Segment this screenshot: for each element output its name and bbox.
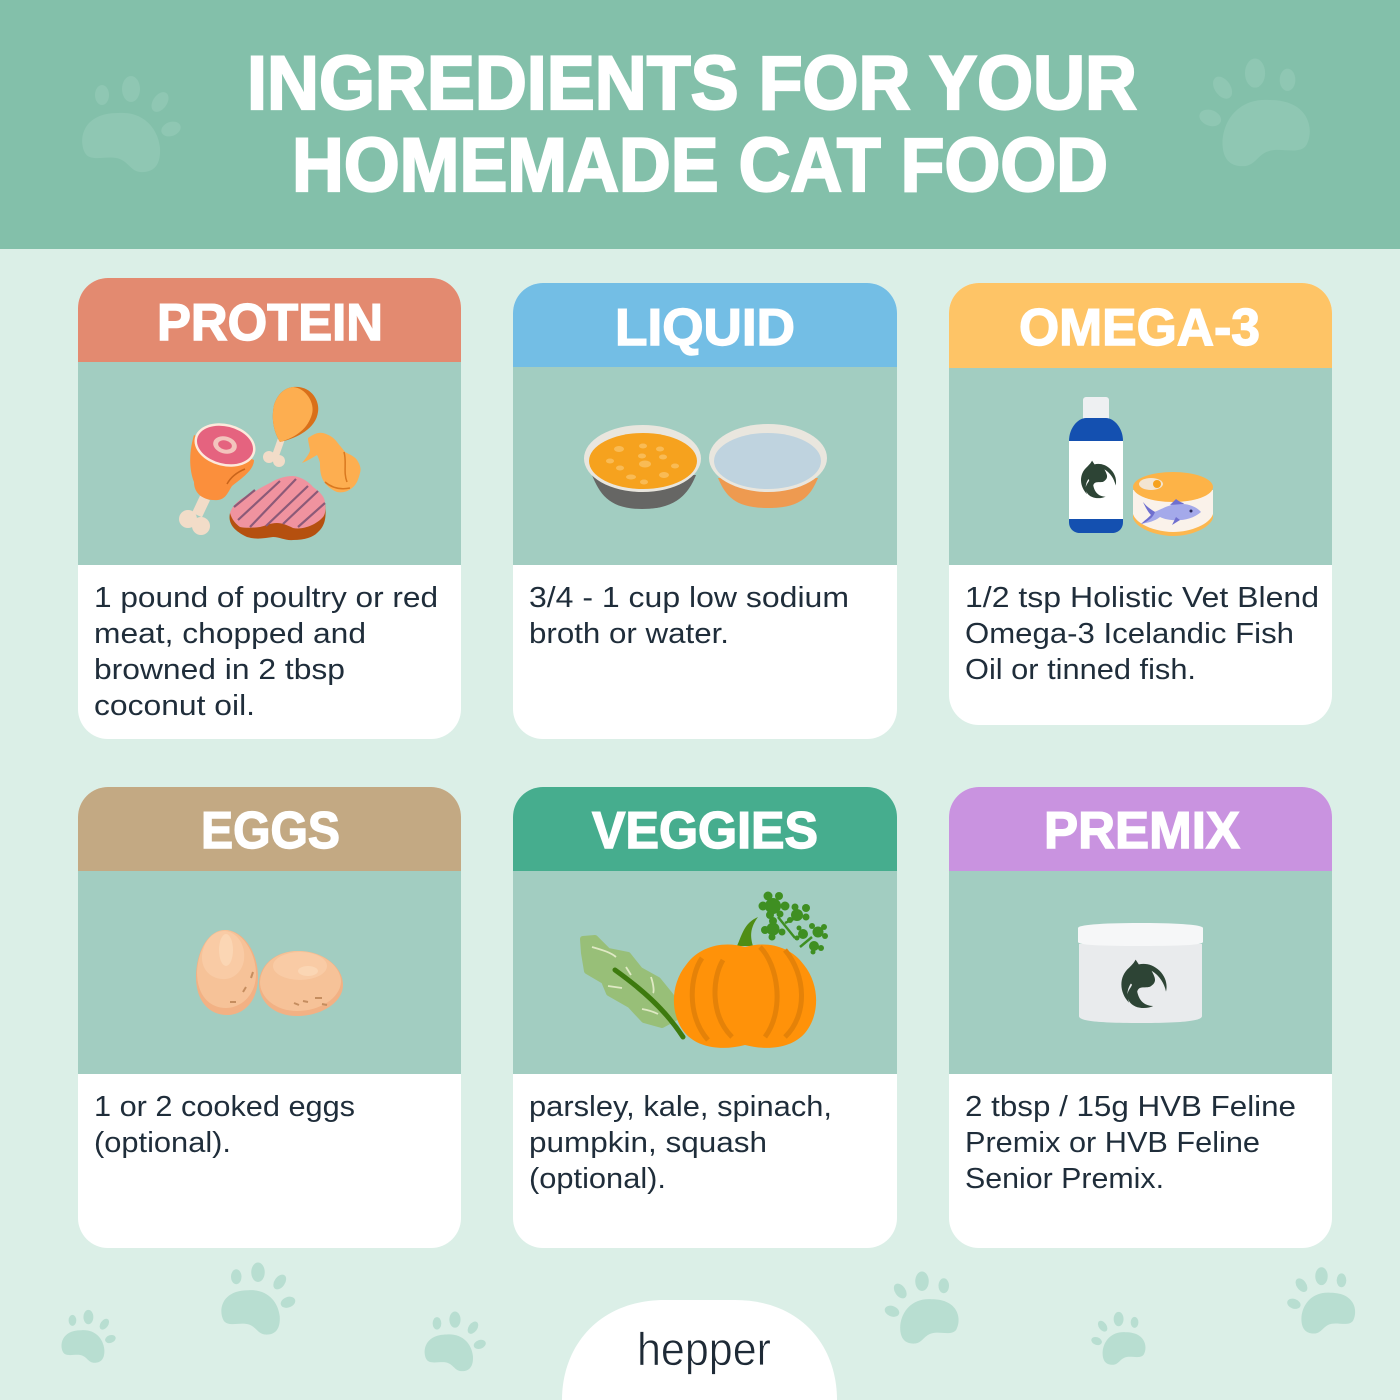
heading: veggies: VEGGIES: [592, 802, 818, 860]
text: veggies description: pumpkin, squash: [529, 1127, 767, 1159]
icon: paw top left: [82, 76, 183, 172]
text: protein description: [94, 582, 438, 722]
icon: eggs: [196, 930, 343, 1016]
icon: water bowl: [709, 424, 827, 508]
icon: brand logo on jar: [1121, 960, 1167, 1008]
text: liquid description: 3/4 - 1 cup low sodium: [529, 582, 849, 614]
text: eggs description: (optional).: [94, 1127, 231, 1159]
text: protein description: meat, chopped and: [94, 618, 366, 650]
title: INGREDIENTS FOR YOUR: [247, 41, 1137, 126]
text: veggies description: (optional).: [529, 1163, 666, 1195]
icon: pumpkin: [674, 917, 816, 1048]
icon: meats: [179, 387, 361, 540]
icon: premix jar: [1078, 923, 1203, 1023]
text: omega-3 description: 1/2 tsp Holistic Vet Blend: [965, 582, 1319, 614]
title: HOMEMADE CAT FOOD: [292, 123, 1108, 208]
text: veggies description: [529, 1091, 832, 1195]
panel: eggs: [78, 787, 461, 1248]
text: omega-3 description: [965, 582, 1319, 686]
icon: paw bottom 6: [1286, 1267, 1355, 1334]
icon: paw bottom 3: [425, 1312, 487, 1371]
text: eggs description: [94, 1091, 355, 1159]
title: [247, 41, 1137, 208]
text: protein description: 1 pound of poultry or red: [94, 582, 438, 614]
heading: liquid: LIQUID: [615, 299, 795, 357]
text: protein description: coconut oil.: [94, 690, 255, 722]
text: liquid description: [529, 582, 849, 650]
icon: tinned fish: [1133, 472, 1213, 536]
panel: omega-3: [949, 283, 1332, 725]
logo badge: hepper: [562, 1300, 837, 1400]
text: premix description: 2 tbsp / 15g HVB Feline: [965, 1091, 1296, 1123]
panel: veggies: [513, 787, 897, 1248]
text: premix description: Premix or HVB Feline: [965, 1127, 1260, 1159]
heading: protein: PROTEIN: [157, 294, 383, 352]
text: protein description: browned in 2 tbsp: [94, 654, 345, 686]
panel: protein: [78, 278, 461, 739]
logo badge: hepper: hepper: [637, 1323, 771, 1375]
panel: liquid: [513, 283, 897, 739]
heading: eggs: EGGS: [201, 802, 340, 860]
icon: paw bottom 5: [1090, 1312, 1145, 1365]
text: veggies description: parsley, kale, spinach,: [529, 1091, 832, 1123]
icon: parsley: [758, 892, 828, 954]
icon: paw bottom 1: [62, 1310, 117, 1363]
icon: broth bowl: [584, 425, 701, 509]
icon: fish oil bottle: [1069, 397, 1123, 533]
panel: premix: [949, 787, 1332, 1248]
text: eggs description: 1 or 2 cooked eggs: [94, 1091, 355, 1123]
icon: kale leaf: [583, 938, 683, 1037]
text: omega-3 description: Omega-3 Icelandic Fish: [965, 618, 1294, 650]
icon: paw bottom 4: [883, 1272, 959, 1344]
text: liquid description: broth or water.: [529, 618, 729, 650]
text: premix description: Senior Premix.: [965, 1163, 1164, 1195]
header band: [0, 0, 1400, 249]
icon: paw bottom 2: [221, 1262, 297, 1335]
text: premix description: [965, 1091, 1296, 1195]
icon: paw top right: [1197, 59, 1310, 166]
text: omega-3 description: Oil or tinned fish.: [965, 654, 1196, 686]
heading: omega-3: OMEGA-3: [1019, 299, 1260, 357]
icon: brand logo on bottle: [1081, 461, 1116, 498]
heading: premix: PREMIX: [1044, 802, 1240, 860]
